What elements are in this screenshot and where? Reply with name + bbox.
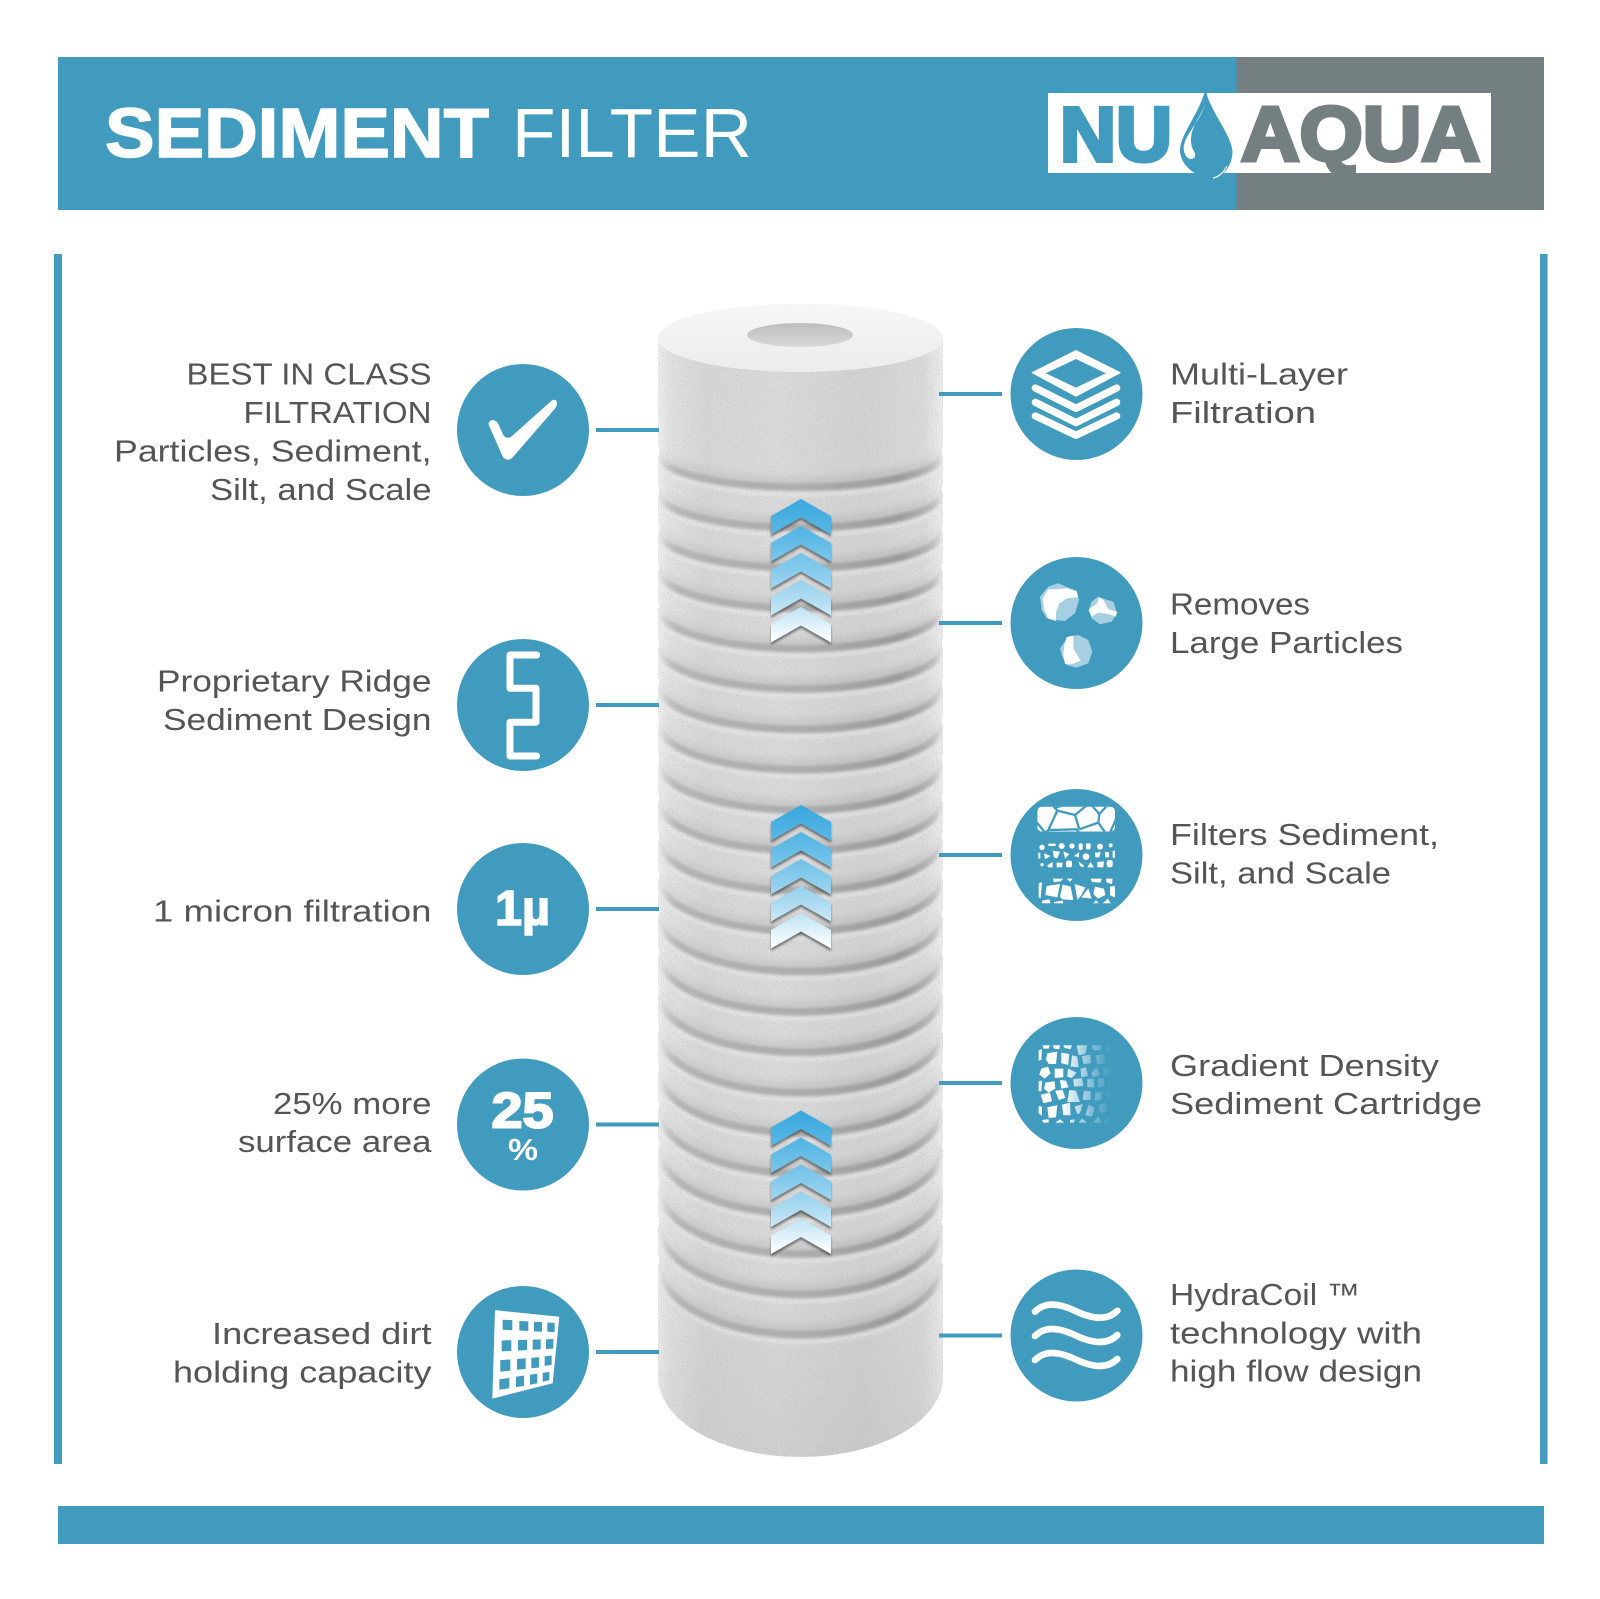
text: dirt capacity: holding capacity [173,1354,432,1390]
text: multi-layer: Multi-Layer [1170,356,1348,392]
icon: 25 percent: % [508,1132,538,1167]
text: hydracoil: high flow design [1170,1354,1422,1388]
feature: multi-layer [1010,328,1348,460]
text: large particles: Large Particles [1170,625,1403,660]
text: filters sediment: Filters Sediment, [1170,817,1439,852]
icon: foam bands [1010,789,1142,921]
text: surface area [238,1086,432,1159]
bottom bar [58,1506,1544,1544]
feature: 1 micron [153,843,589,975]
right side rule [1540,254,1548,1464]
icon: 25 percent: 25 [492,1082,554,1138]
text: best in class: Silt, and Scale [210,472,432,507]
text: large particles: Removes [1170,586,1310,622]
text: filters sediment [1170,817,1439,890]
text: hydracoil: HydraCoil ™ [1170,1277,1360,1312]
cap top face [658,304,943,372]
icon: 25 percent [457,1058,589,1190]
icon: flow waves [1010,1270,1142,1402]
text: best in class: FILTRATION [244,395,432,430]
left side rule [54,254,62,1464]
centre hole [747,323,853,347]
text: 1 micron: 1 micron filtration [153,894,432,928]
icon: 1 micron: 1µ [495,882,550,936]
text: multi-layer: Filtration [1170,395,1316,430]
icon: ridge profile [457,639,589,771]
text: hydracoil [1170,1277,1422,1388]
feature: hydracoil [1010,1270,1422,1402]
text: surface area: 25% more [273,1086,432,1121]
text: ridge design: Proprietary Ridge [157,664,432,698]
icon: stacked layers [1010,328,1142,460]
text: large particles [1170,586,1403,660]
flow chevrons: top [771,499,831,645]
feature: surface area [238,1058,589,1190]
text: filters sediment: Silt, and Scale [1170,856,1391,890]
feature: best in class [114,356,589,507]
text: gradient density [1170,1048,1482,1121]
icon: 1 micron [457,843,589,975]
icon: gradient foam [1010,1017,1142,1149]
feature: filters sediment [1010,789,1439,921]
header bar [58,57,1544,210]
icon: water drop [1180,89,1232,178]
logo: NU AQUA: NU [1060,92,1172,178]
text: ridge design [157,664,432,737]
text: dirt capacity: Increased dirt [212,1316,432,1351]
icon: particles [1010,557,1142,689]
text: dirt capacity [173,1316,432,1390]
text: best in class [114,356,432,507]
filter cartridge [650,300,950,1465]
flow chevrons: middle [771,805,831,951]
feature: gradient density [1010,1017,1482,1149]
text: ridge design: Sediment Design [163,702,432,737]
text: best in class: Particles, Sediment, [114,434,432,468]
text: surface area: surface area [238,1124,432,1159]
logo: NU AQUA: AQUA [1241,92,1480,178]
text: gradient density: Sediment Cartridge [1170,1086,1482,1121]
connector lines [596,394,1002,1352]
feature: ridge design [157,639,589,771]
icon: check mark [457,364,589,496]
feature: dirt capacity [173,1286,589,1418]
flow chevrons: bottom [771,1110,831,1256]
text: multi-layer [1170,356,1348,430]
title: SEDIMENT [105,94,489,172]
logo: NU AQUA [1048,89,1491,178]
feature: large particles [1010,557,1403,689]
icon: mesh grid [457,1286,589,1418]
title: FILTER [512,94,752,172]
text: hydracoil: technology with [1170,1316,1422,1350]
text: gradient density: Gradient Density [1170,1048,1440,1083]
text: best in class: BEST IN CLASS [186,356,432,392]
